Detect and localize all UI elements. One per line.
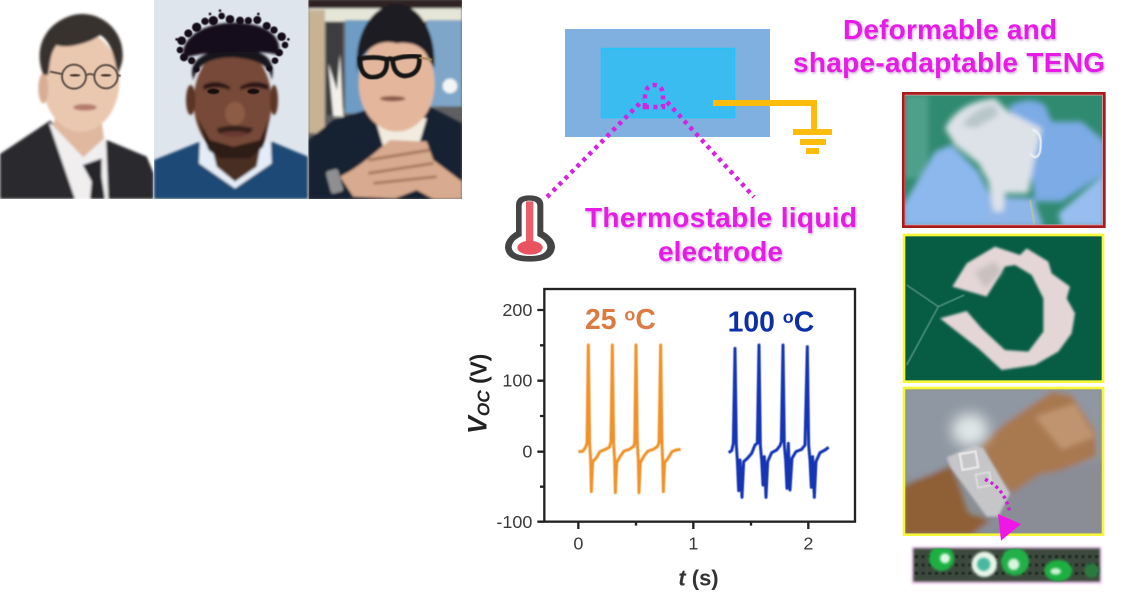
dotted path and arrow to LEDs <box>985 479 1010 513</box>
y axis title: V <box>463 414 493 434</box>
x axis tick labels: 2 <box>803 533 813 553</box>
label: 100 °C: o <box>783 307 794 327</box>
label: 25 °C: o <box>624 304 635 324</box>
x axis tick labels: 1 <box>688 533 698 553</box>
y axis tick labels: 0 <box>522 442 532 462</box>
portrait: second researcher <box>154 0 308 199</box>
encapsulation layer <box>565 29 770 137</box>
label: thermostable liquid electrode: Thermostable liquid <box>585 202 857 233</box>
x axis tick labels <box>573 533 813 553</box>
y axis title: OC <box>473 390 493 416</box>
title: deformable TENG <box>793 14 1105 78</box>
photo panel: lit green LED strip <box>912 546 1102 584</box>
x axis tick labels: 0 <box>573 533 583 553</box>
icon: thermometer <box>505 195 555 262</box>
label: thermostable liquid electrode <box>585 202 857 267</box>
y axis tick labels: 100 <box>502 371 532 391</box>
label: 100 °C: C <box>794 307 814 339</box>
TENG schematic <box>547 29 832 197</box>
label: thermostable liquid electrode: electrode <box>658 236 783 267</box>
portrait: first researcher <box>0 0 154 199</box>
liquid electrode layer <box>602 48 734 118</box>
plot frame and ticks <box>537 289 855 529</box>
photo panel: device worn on wrist <box>903 388 1103 541</box>
y axis tick labels: -100 <box>496 512 532 532</box>
line chart: open-circuit voltage vs time <box>463 289 855 590</box>
y axis tick labels: 200 <box>502 300 532 320</box>
title: deformable TENG: Deformable and <box>843 14 1057 45</box>
y axis tick labels <box>496 300 532 532</box>
y axis title: (V) <box>466 354 492 390</box>
title: deformable TENG: shape-adaptable TENG <box>793 47 1105 78</box>
electrode wire and ground symbol <box>713 100 832 154</box>
trace: 25 °C <box>578 345 681 493</box>
dotted callout lines <box>547 85 754 197</box>
portrait: third researcher <box>308 0 462 199</box>
label: 100 °C: 100 <box>728 307 775 339</box>
trace: 100 °C <box>729 345 829 497</box>
x axis title: t (s) <box>678 565 719 590</box>
label: 25 °C: C <box>635 304 656 336</box>
photo panel: flexible ring-shaped device <box>904 235 1103 382</box>
photo panel: device pinched by gloved fingers <box>903 93 1105 227</box>
label: 25 °C: 25 <box>585 304 617 336</box>
